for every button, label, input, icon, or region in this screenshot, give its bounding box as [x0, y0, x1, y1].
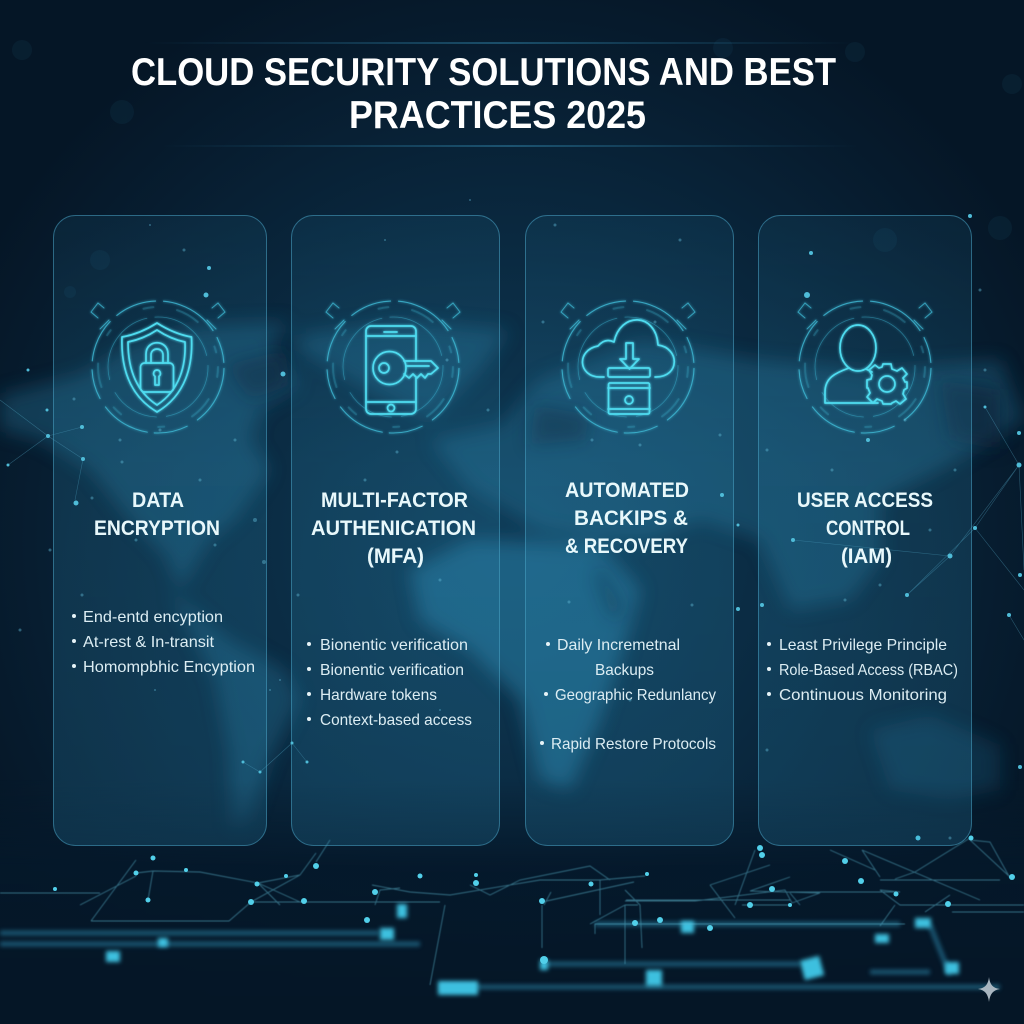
background bokeh — [12, 38, 1022, 298]
heading: (IAM) — [841, 545, 892, 568]
circuit network — [0, 836, 1024, 995]
map dark seas — [225, 350, 1000, 620]
bullet list: Geographic Redunlancy — [555, 687, 716, 704]
heading: USER ACCESS — [797, 489, 933, 512]
bullet list: Context-based access — [320, 712, 472, 729]
bullet list: Rapid Restore Protocols — [551, 736, 716, 753]
heading — [565, 479, 689, 558]
bullet list — [307, 637, 472, 729]
heading: CONTROL — [826, 517, 910, 540]
heading: BACKIPS & — [574, 507, 688, 530]
bullet list: Least Privilege Principle — [779, 637, 947, 654]
world map — [0, 320, 1024, 830]
heading: (MFA) — [367, 545, 424, 568]
bullet list — [767, 637, 958, 704]
bullet list: Bionentic verification — [320, 662, 464, 679]
icon: user with gear — [780, 282, 950, 452]
bullet list: At-rest & In-transit — [83, 634, 215, 651]
bullet list: Continuous Monitoring — [779, 687, 947, 704]
heading — [94, 489, 220, 540]
bullet list: Hardware tokens — [320, 687, 437, 704]
title: PRACTICES 2025 — [349, 94, 646, 137]
heading: & RECOVERY — [565, 535, 688, 558]
bullet list: Role-Based Access (RBAC) — [779, 662, 958, 679]
scattered particles — [6, 214, 1022, 774]
bullet list: Daily Incremetnal — [557, 637, 680, 654]
bullet list: Bionentic verification — [320, 637, 468, 654]
icon: watermark sparkle — [978, 977, 1000, 1002]
panel: user access control — [758, 216, 972, 846]
heading: DATA — [132, 489, 184, 512]
heading: MULTI-FACTOR — [321, 489, 468, 512]
dim particles — [18, 199, 986, 840]
panel: multi-factor authentication — [292, 216, 500, 846]
panel: data encryption — [54, 216, 266, 846]
title rules — [144, 42, 860, 146]
heading: AUTOMATED — [565, 479, 689, 502]
bullet list: End-entd encyption — [83, 609, 223, 626]
icon: shield with padlock — [73, 282, 243, 452]
icon: cloud backup — [543, 282, 713, 452]
bullet list — [540, 637, 716, 753]
icon: phone with key — [308, 282, 478, 452]
heading: ENCRYPTION — [94, 517, 220, 540]
side networks — [0, 400, 1024, 772]
heading — [797, 489, 933, 568]
heading: AUTHENICATION — [311, 517, 476, 540]
heading — [311, 489, 476, 568]
title — [131, 51, 836, 137]
bullet list: Homompbhic Encyption — [83, 659, 255, 676]
title: CLOUD SECURITY SOLUTIONS AND BEST — [131, 51, 836, 94]
bullet list — [72, 609, 255, 676]
bullet list: Backups — [595, 662, 654, 679]
panel: automated backups — [526, 216, 734, 846]
